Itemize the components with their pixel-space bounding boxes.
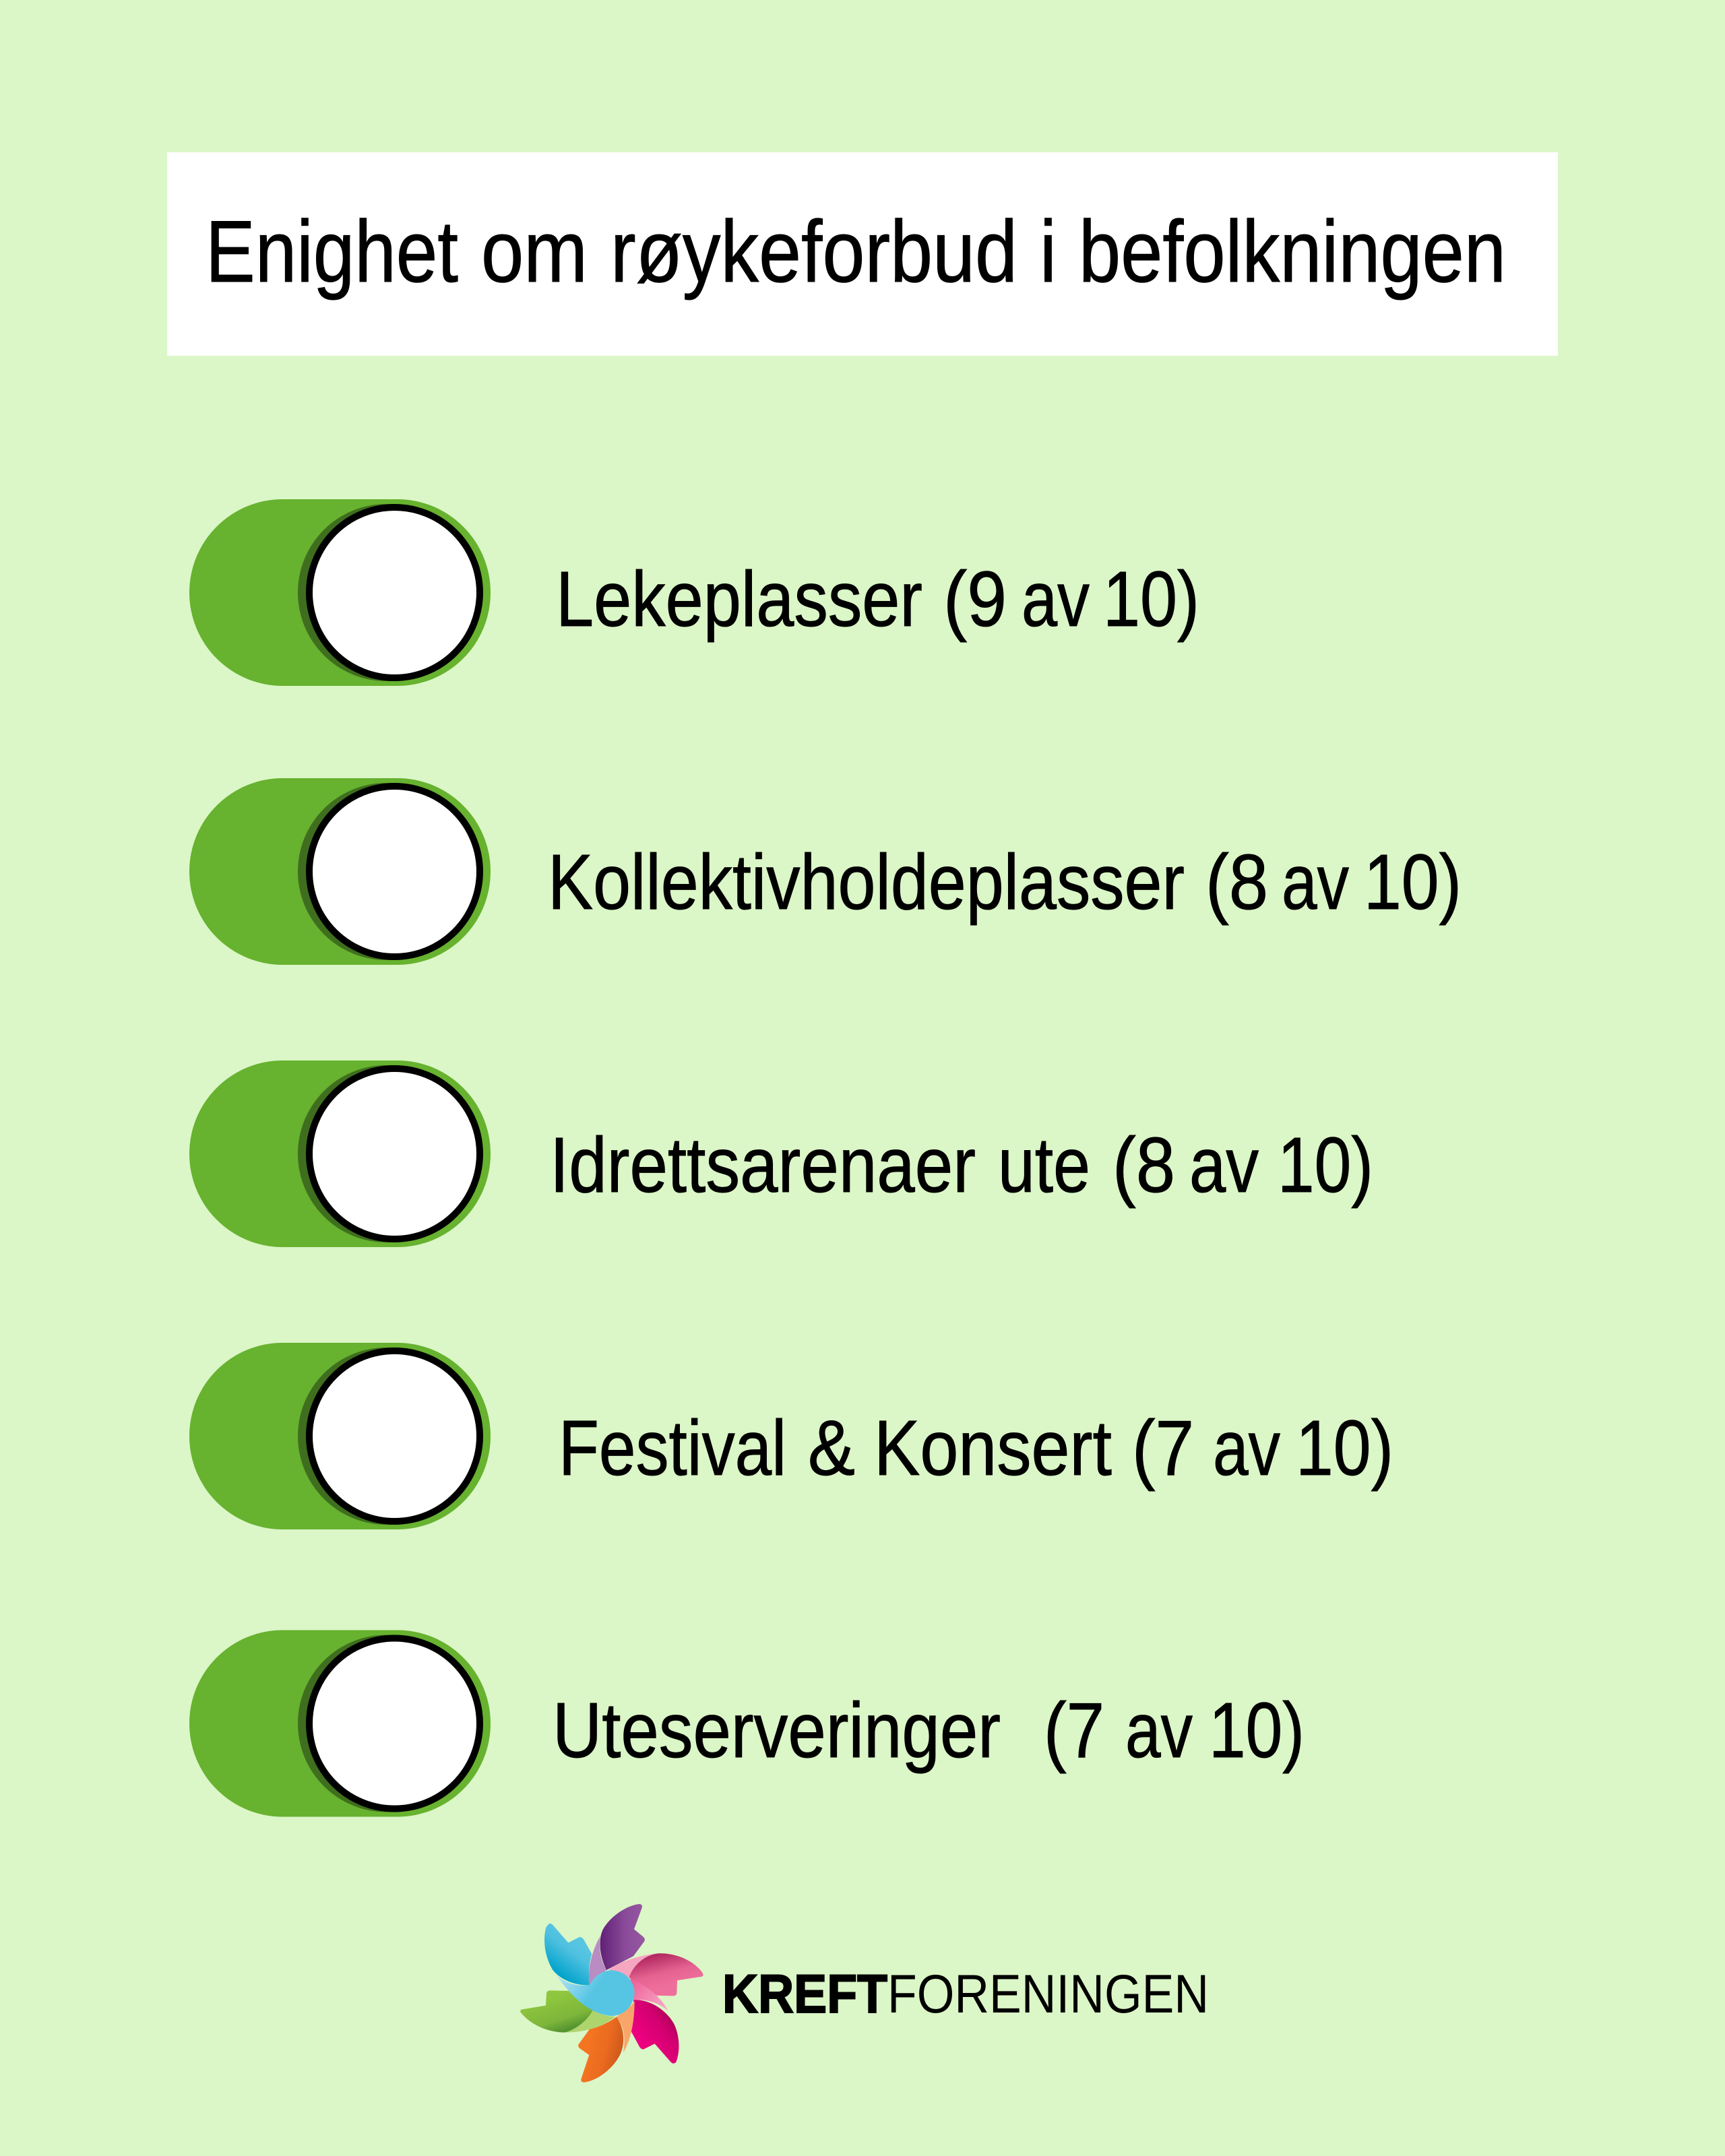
row: Lekeplasser [189, 499, 1199, 686]
label [559, 1404, 1393, 1492]
label: Festival [559, 1404, 786, 1492]
title text: Enighet [206, 202, 458, 300]
label: Konsert [874, 1404, 1112, 1492]
wordmark: FORENINGEN [887, 1964, 1209, 2025]
label: Kollektivholdeplasser [548, 838, 1185, 926]
label: av [1282, 838, 1349, 926]
title text: om [481, 202, 588, 300]
toggle switch [189, 499, 491, 686]
label: 10) [1103, 555, 1199, 643]
wordmark [722, 1964, 1209, 2025]
label: av [1125, 1686, 1193, 1774]
title panel [167, 152, 1558, 356]
label: (7 [1044, 1686, 1104, 1774]
toggle switch [189, 1630, 491, 1816]
label: 10) [1209, 1686, 1305, 1774]
label: ute [998, 1121, 1090, 1209]
label: Lekeplasser [556, 555, 922, 643]
title text [206, 202, 1506, 300]
row: Festival & Konsert [189, 1343, 1393, 1529]
label [550, 1121, 1373, 1209]
label: (7 [1132, 1404, 1194, 1492]
label: (8 [1112, 1121, 1175, 1209]
label: av [1022, 555, 1090, 643]
label: & [808, 1404, 855, 1492]
toggle switch [189, 778, 491, 965]
label: (9 [943, 555, 1007, 643]
title text: i [1040, 202, 1057, 300]
title text: røykeforbud [610, 202, 1017, 300]
label: Idrettsarenaer [550, 1121, 976, 1209]
label: av [1213, 1404, 1280, 1492]
label: 10) [1364, 838, 1462, 926]
wordmark: KREFT [722, 1964, 887, 2025]
toggle switch [189, 1060, 491, 1247]
label: (8 [1205, 838, 1268, 926]
label: 10) [1296, 1404, 1393, 1492]
label: Uteserveringer [553, 1686, 1001, 1774]
toggle switch [189, 1343, 491, 1529]
label [556, 555, 1199, 643]
row: Uteserveringer [189, 1630, 1305, 1816]
label [553, 1686, 1305, 1774]
title text: befolkningen [1079, 202, 1506, 300]
label: av [1189, 1121, 1259, 1209]
row: Kollektivholdeplasser [189, 778, 1462, 965]
title box [167, 152, 1558, 356]
icon: pinwheel [520, 1904, 703, 2083]
label: 10) [1278, 1121, 1373, 1209]
logo: Kreftforeningen [520, 1904, 1209, 2083]
row: Idrettsarenaer ute [189, 1060, 1373, 1247]
